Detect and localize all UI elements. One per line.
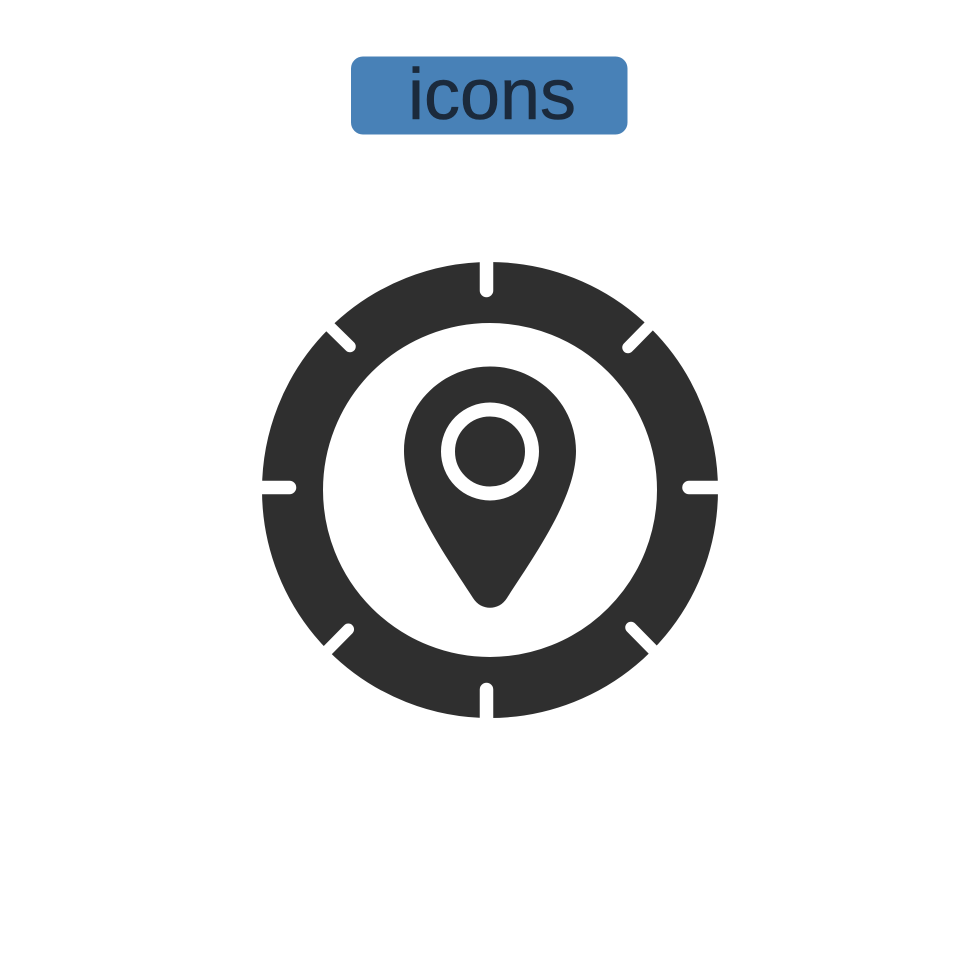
map pin xyxy=(404,366,576,608)
icon: location compass xyxy=(250,250,730,730)
title: icons: icons xyxy=(408,55,576,135)
badge: icons label xyxy=(351,55,628,135)
outer ring xyxy=(292,292,688,688)
ring tick marks xyxy=(250,250,730,730)
pin ring xyxy=(448,410,532,494)
